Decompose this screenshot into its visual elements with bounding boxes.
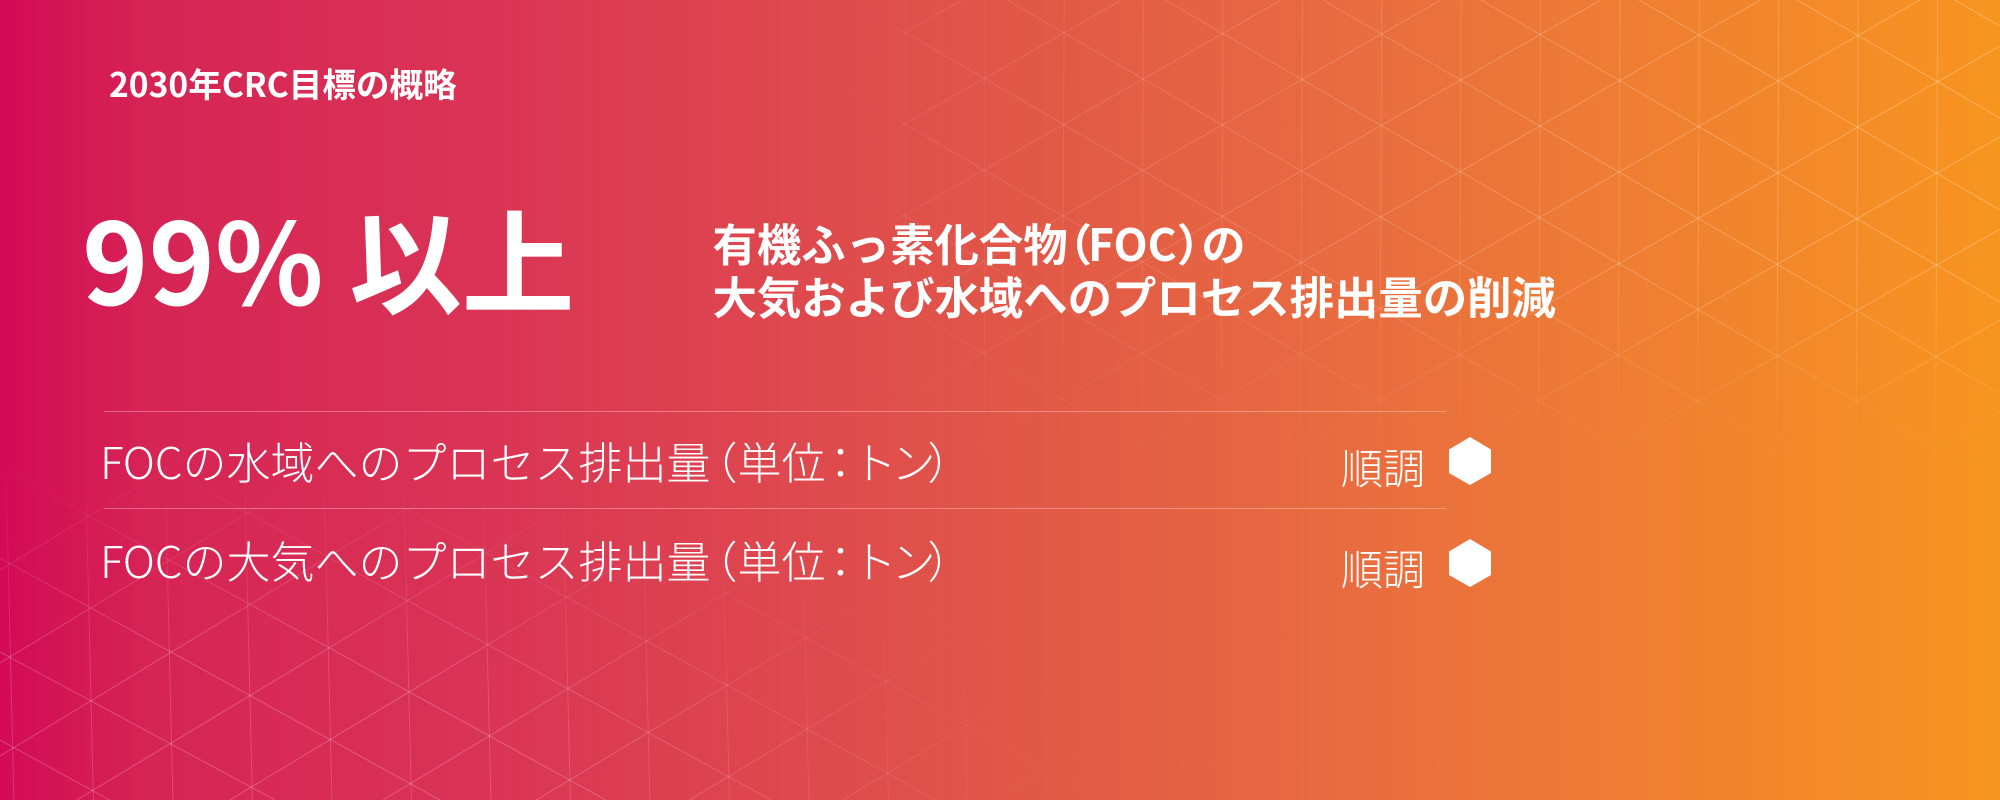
key figure: 99% or more: 99% 以上 bbox=[82, 175, 574, 338]
status text: on track: 順調 bbox=[1341, 436, 1425, 497]
heading: 2030 CRC target overview: 2030年CRC目標の概略 bbox=[109, 58, 457, 107]
headline: target description: 大気および水域へのプロセス排出量の削減 bbox=[712, 262, 1556, 327]
icon: white hexagon status bbox=[1449, 437, 1491, 485]
headline: target description: 有機ふっ素化合物（FOC）の bbox=[712, 209, 1246, 274]
row: FOC process emissions to water bbox=[100, 428, 1491, 497]
row: FOC process emissions to air bbox=[100, 526, 1491, 598]
icon: white hexagon status bbox=[1449, 539, 1491, 587]
status text: on track: 順調 bbox=[1341, 537, 1425, 598]
headline: target description bbox=[712, 209, 1556, 327]
row label: FOCの水域へのプロセス排出量（単位：トン） bbox=[100, 428, 971, 492]
row label: FOCの大気へのプロセス排出量（単位：トン） bbox=[100, 526, 971, 590]
